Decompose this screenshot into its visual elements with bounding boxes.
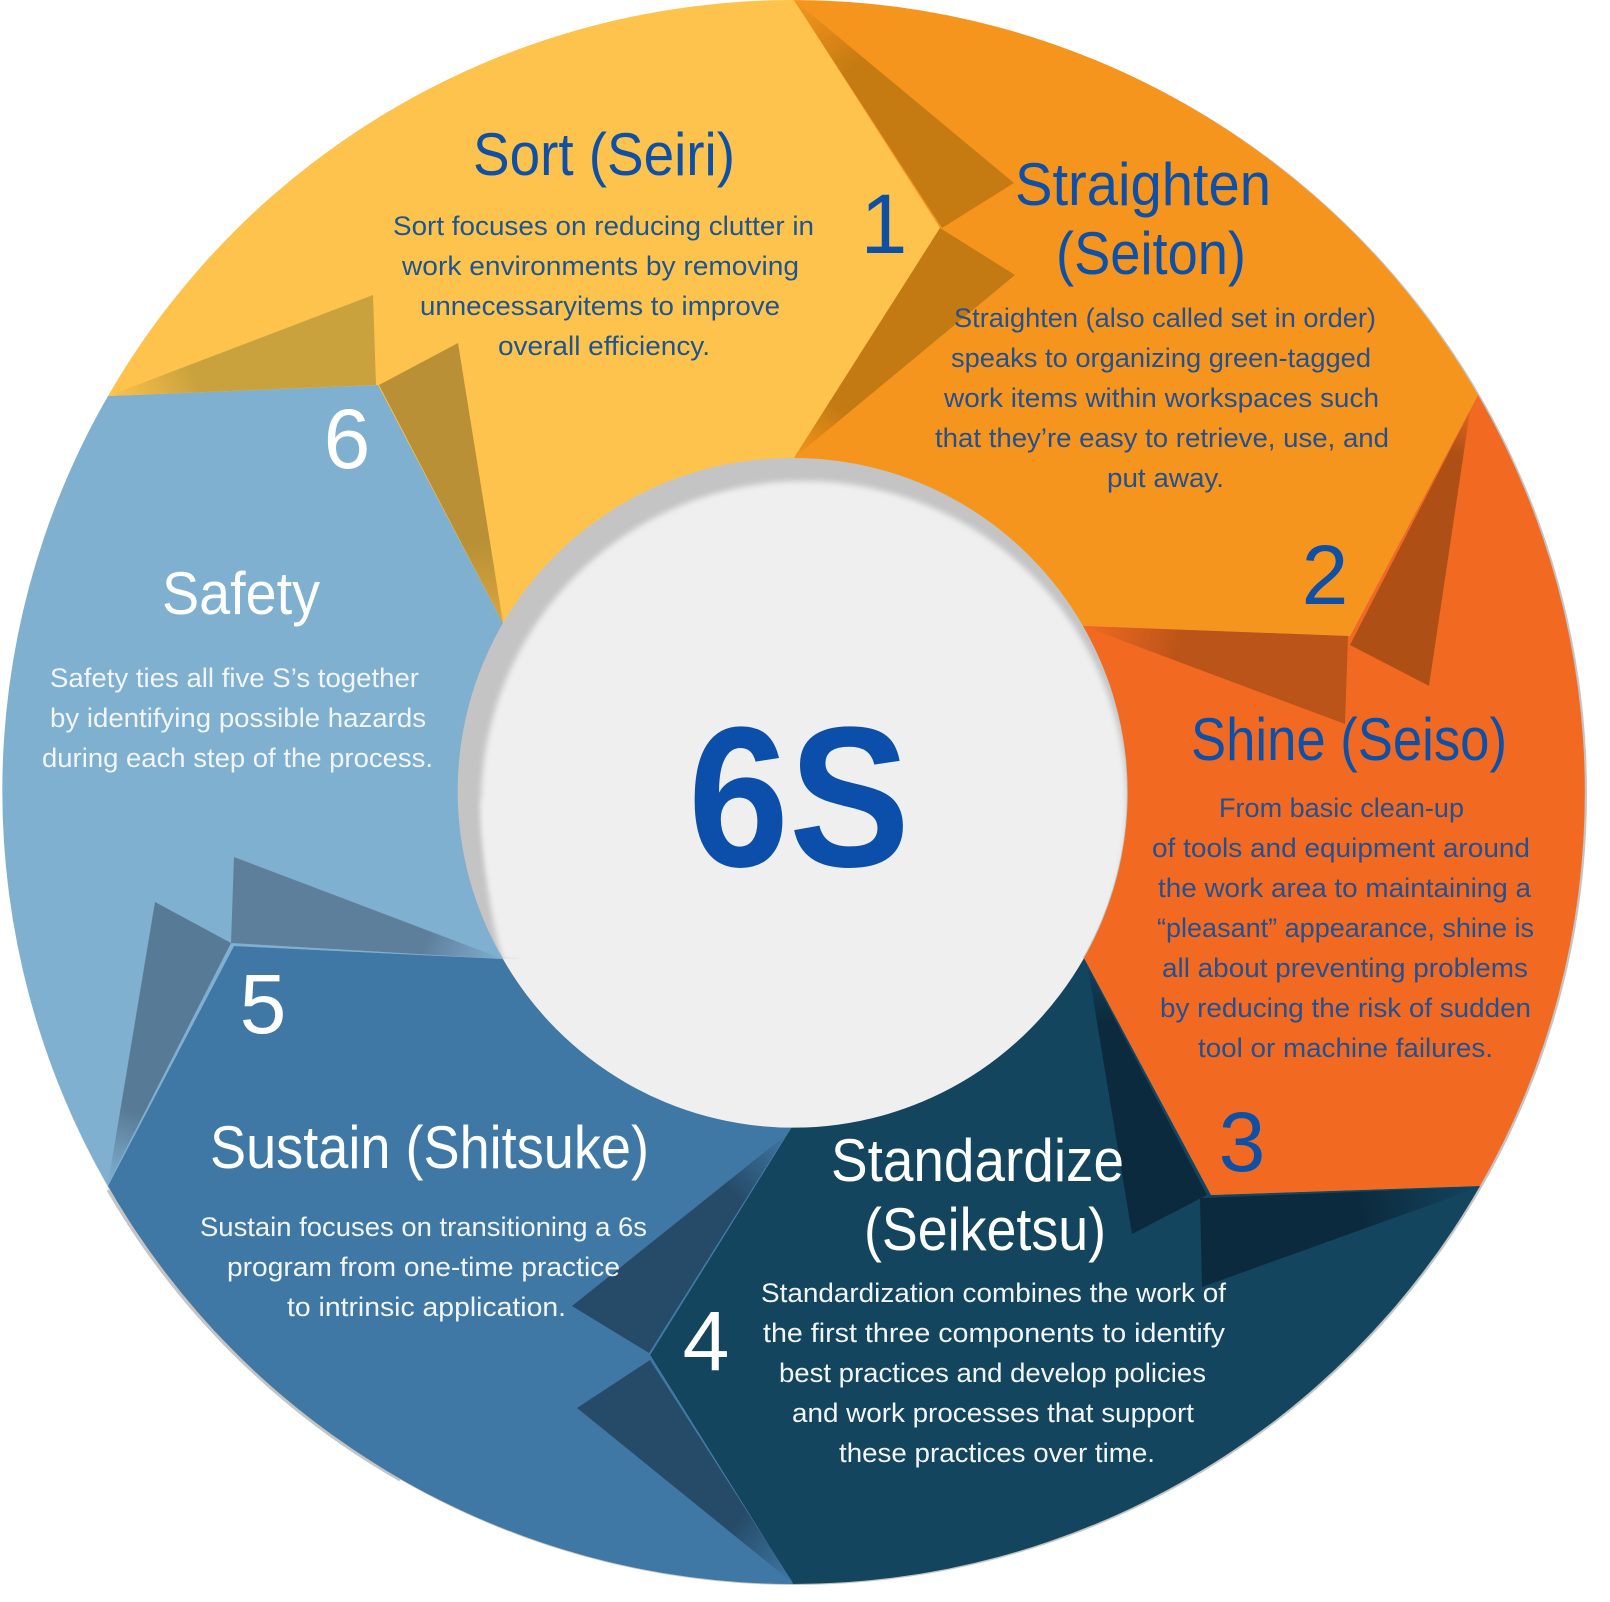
- text: Straighten description: Straighten (also called set in order): [954, 303, 1376, 333]
- centre disc: 6S: [459, 458, 1127, 1128]
- text: Standardize description: best practices and develop policies: [779, 1358, 1206, 1388]
- text: Sort description: [393, 211, 814, 361]
- text: Standardize description: [761, 1278, 1227, 1468]
- text: Standardize description: these practices over time.: [839, 1438, 1155, 1468]
- text: Shine description: tool or machine failures.: [1198, 1033, 1493, 1063]
- text: Sustain description: program from one-time practice: [227, 1252, 620, 1282]
- heading: Straighten: [1015, 151, 1271, 287]
- text: Sustain description: [200, 1212, 647, 1322]
- text: Shine description: the work area to maintaining a: [1158, 873, 1532, 903]
- text: Sort description: work environments by removing: [401, 251, 799, 281]
- text: Standardize description: the first three components to identify: [763, 1318, 1226, 1348]
- shadow: Safety upper fold: [231, 857, 503, 959]
- heading: Standardize: [831, 1127, 1124, 1263]
- panel: Safety: [2, 385, 503, 1186]
- text: Shine description: all about preventing problems: [1162, 953, 1528, 983]
- panel: Shine: [1083, 395, 1585, 1195]
- text: Shine description: From basic clean-up: [1219, 793, 1464, 823]
- number 3: 3: [1219, 1095, 1265, 1189]
- shadow: Sustain lower fold: [577, 1360, 793, 1583]
- text: Sort description: Sort focuses on reducing clutter in: [393, 211, 814, 241]
- number 4: 4: [683, 1294, 729, 1388]
- number 6: 6: [324, 392, 370, 486]
- title: 6S: 6S: [688, 686, 910, 909]
- shadow: Standardize upper fold: [1088, 968, 1207, 1234]
- panel: Sustain: [108, 946, 793, 1584]
- text: Straighten description: work items within workspaces such: [943, 383, 1379, 413]
- text: Sort description: overall efficiency.: [498, 331, 710, 361]
- text: Sustain description: to intrinsic application.: [287, 1292, 566, 1322]
- panel: Standardize: [650, 958, 1480, 1584]
- text: Sustain description: Sustain focuses on transitioning a 6s: [200, 1212, 647, 1242]
- text: Safety description: by identifying possible hazards: [50, 703, 426, 733]
- text: Straighten description: put away.: [1107, 463, 1224, 493]
- text: Straighten description: [935, 303, 1389, 493]
- heading: Shine: Shine (Seiso): [1191, 706, 1507, 773]
- panel: Straighten: [794, 0, 1478, 636]
- shadow: Straighten lower fold: [794, 228, 1015, 458]
- text: Straighten description: that they’re easy to retrieve, use, and: [935, 423, 1389, 453]
- heading: Safety: Safety: [162, 560, 320, 627]
- number 2: 2: [1302, 528, 1348, 622]
- number 1: 1: [861, 177, 907, 271]
- text: Safety description: Safety ties all five S’s together: [50, 663, 419, 693]
- shadow: Sustain upper fold: [572, 1135, 786, 1353]
- text: Standardize description: and work processes that support: [792, 1398, 1195, 1428]
- shadow: Shine upper fold: [1350, 411, 1470, 686]
- number 5: 5: [240, 957, 286, 1051]
- shadow: Shine lower fold: [1083, 626, 1348, 724]
- text: Standardize description: Standardization combines the work of: [761, 1278, 1227, 1308]
- text: Safety description: during each step of the process.: [42, 743, 433, 773]
- text: Straighten description: speaks to organizing green-tagged: [951, 343, 1371, 373]
- heading: Sort: Sort (Seiri): [473, 121, 735, 188]
- text: Shine description: “pleasant” appearance, shine is: [1157, 913, 1534, 943]
- shadow: Standardize lower fold: [1200, 1187, 1480, 1287]
- heading: Standardize: (Seiketsu): [864, 1196, 1106, 1263]
- heading: Sustain: Sustain (Shitsuke): [210, 1114, 649, 1181]
- text: Shine description: by reducing the risk of sudden: [1160, 993, 1531, 1023]
- shadow: Sort lower fold: [379, 343, 503, 623]
- heading: Standardize: Standardize: [831, 1127, 1124, 1194]
- text: Shine description: of tools and equipment around: [1152, 833, 1530, 863]
- heading: Straighten: (Seiton): [1056, 220, 1246, 287]
- text: Shine description: [1152, 793, 1534, 1063]
- panel: Sort: [108, 0, 940, 623]
- text: Safety description: [42, 663, 433, 773]
- shadow: Straighten upper fold: [794, 0, 1014, 228]
- shadow: Safety lower fold: [108, 902, 231, 1184]
- heading: Straighten: Straighten: [1015, 151, 1271, 218]
- text: Sort description: unnecessaryitems to improve: [420, 291, 780, 321]
- shadow: Sort upper fold: [108, 295, 376, 396]
